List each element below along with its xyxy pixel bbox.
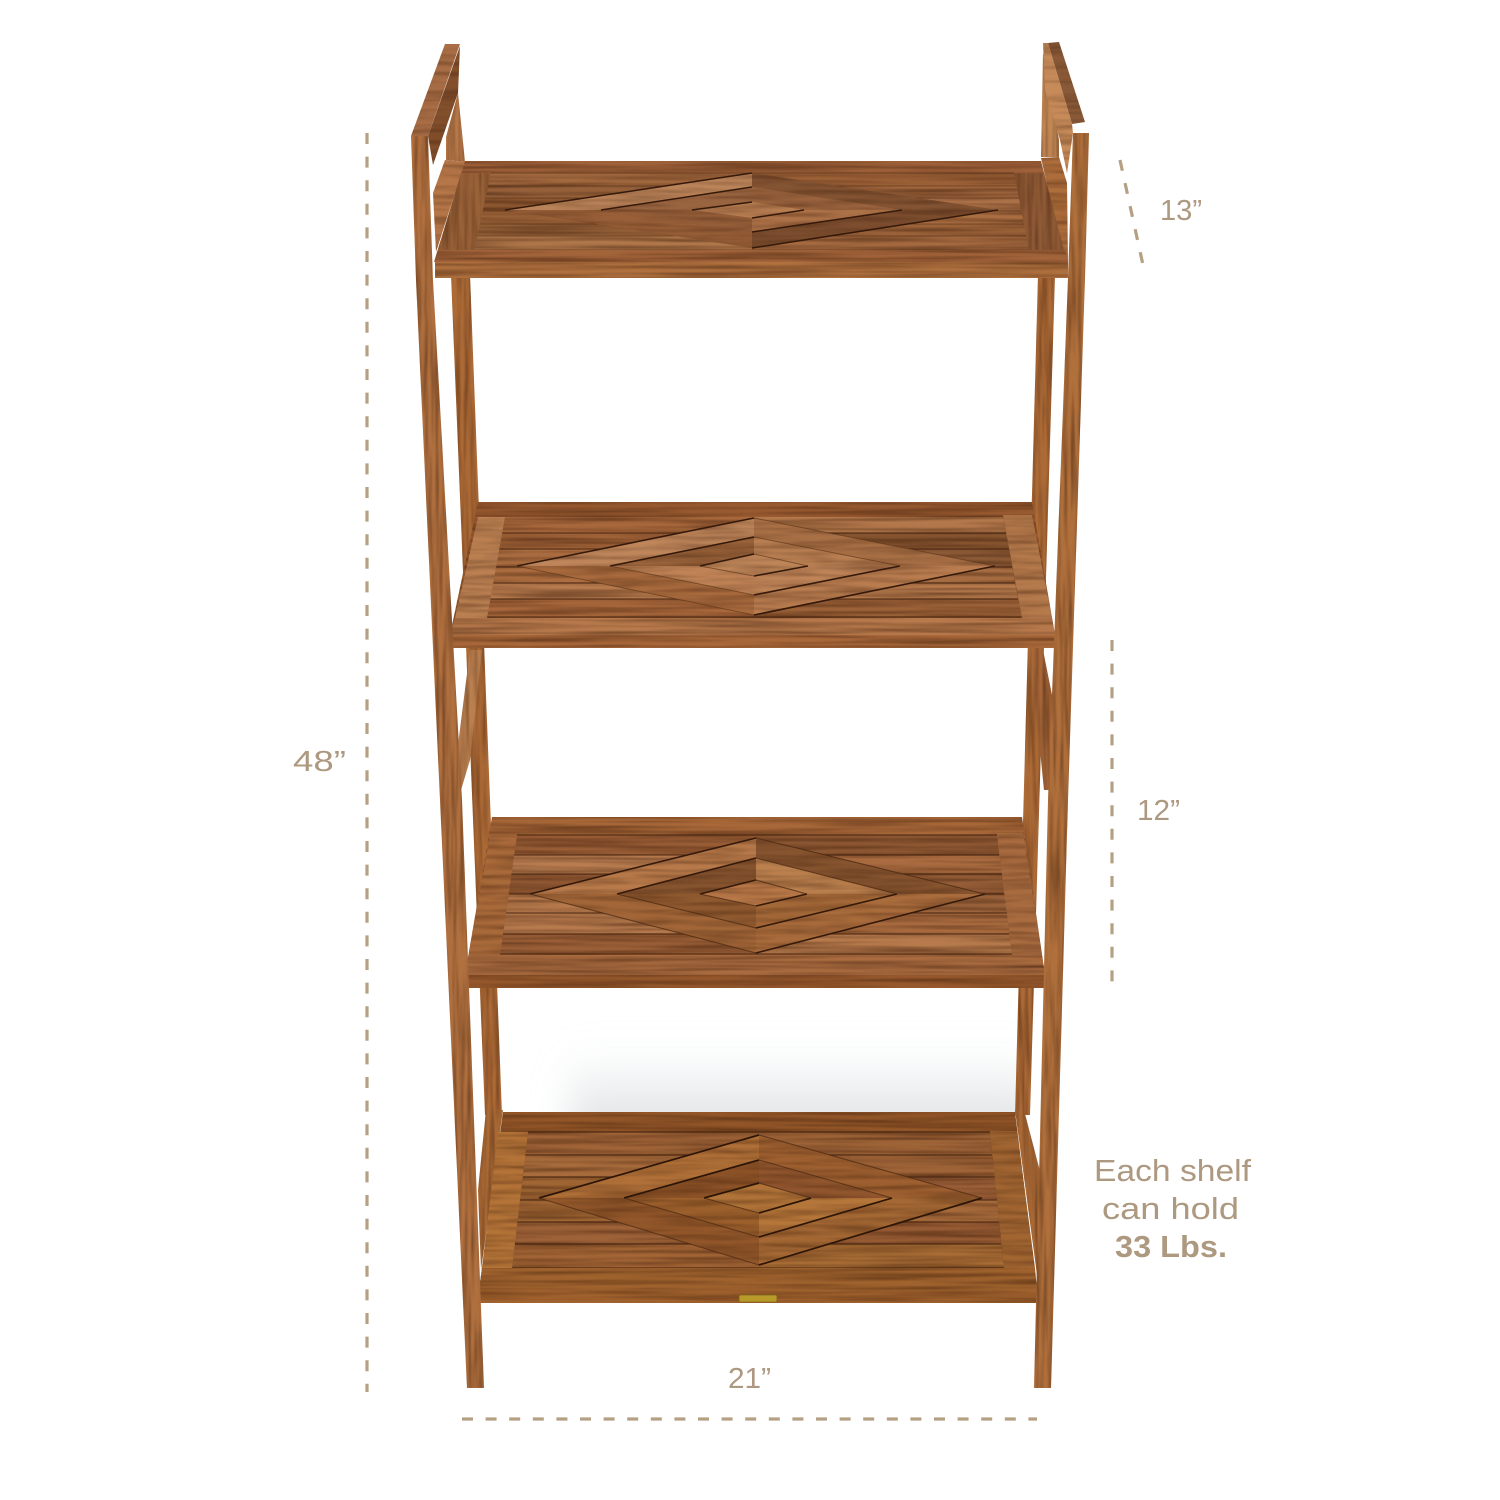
shelf 4 slats [512,1132,1004,1268]
shelf 3 slat gaps [500,835,1012,954]
left post rear [446,93,465,162]
left lower side rail [478,1110,503,1270]
21 inch width dashed line [462,1417,1037,1421]
top frame right [1041,42,1085,262]
13 inch label: 13” [1160,195,1202,227]
shelf 1 [434,161,1068,278]
shelf 3 right frame [997,833,1042,955]
12 inch label: 12” [1137,795,1180,827]
shelf 4 [479,1112,1037,1303]
shelf 2 slats [487,517,1022,617]
shelf 1 surface [434,161,1067,262]
shelf 1 right frame [1014,173,1064,250]
shelf 2 diamond [517,518,995,615]
shelf 2 diamond grooves [517,518,995,615]
shelf 2 surface [450,502,1055,635]
left top bar underside [428,46,460,165]
shelf 4 diamond grooves [539,1135,982,1265]
floor shadow behind bottom shelf [562,1069,1016,1112]
shelf 4 surface [479,1112,1037,1290]
weight capacity callout: 33 Lbs. [1115,1229,1227,1264]
right post rear [1041,53,1059,157]
shelf 1 front band [435,250,1068,262]
left lower top rail [433,160,465,252]
shelf 1 front face [435,262,1068,278]
shelf 2 right frame [1003,515,1052,618]
weight capacity callout: Each shelf [1094,1153,1251,1188]
shelf 4 front band [479,1268,1037,1290]
shelf 2 [450,502,1055,648]
shelf 3 [465,817,1045,988]
shelf 4 diamond [539,1135,982,1265]
shelf 2 front face [450,635,1055,648]
shelf 3 left frame [469,835,517,955]
shelf 2 front band [450,618,1055,635]
weight capacity callout [1094,1153,1251,1264]
right top bar side [1043,43,1073,173]
shelf 1 left frame [438,173,491,250]
48 inch label: 48” [293,746,346,778]
left top bar face [411,44,460,136]
shelf 3 diamond grooves [530,838,985,953]
brass badge [739,1295,777,1302]
shelf 3 front band [465,955,1045,975]
shelf 1 diamond grooves [505,173,998,248]
shelf 1 slat gaps [474,173,1029,250]
shelf 3 diamond [530,838,985,953]
left front leg [411,136,484,1388]
right front leg [1034,133,1089,1388]
shelf 1 diamond [505,173,998,248]
right top bar surface [1048,42,1085,124]
shelf 3 slats [500,835,1012,954]
shelf 3 surface [465,817,1045,975]
shelf 4 front face [479,1290,1037,1303]
right lower side rail [1015,1110,1041,1275]
shelf 4 slat gaps [512,1132,1004,1268]
left mid side rail [458,650,482,790]
top frame left [411,44,465,252]
48 inch height dashed line [365,133,369,1392]
right rear leg [1015,275,1055,1115]
shelf 2 slat gaps [487,533,1022,617]
12 inch dashed line [1110,640,1114,984]
shelf 1 slats [474,173,1029,250]
shelf 4 right frame [990,1131,1035,1268]
shelf 4 left frame [482,1132,528,1268]
left rear leg [451,275,502,1115]
13 inch dashed line [1120,160,1143,265]
right lower top rail [1041,157,1068,262]
right mid side rail [1030,650,1053,790]
weight capacity callout: can hold [1102,1191,1239,1226]
21 inch label: 21” [728,1363,771,1395]
front legs [411,133,1089,1388]
rear legs and side rails [451,275,1055,1275]
shelf 2 left frame [455,517,505,618]
shelf 3 front face [465,975,1045,988]
